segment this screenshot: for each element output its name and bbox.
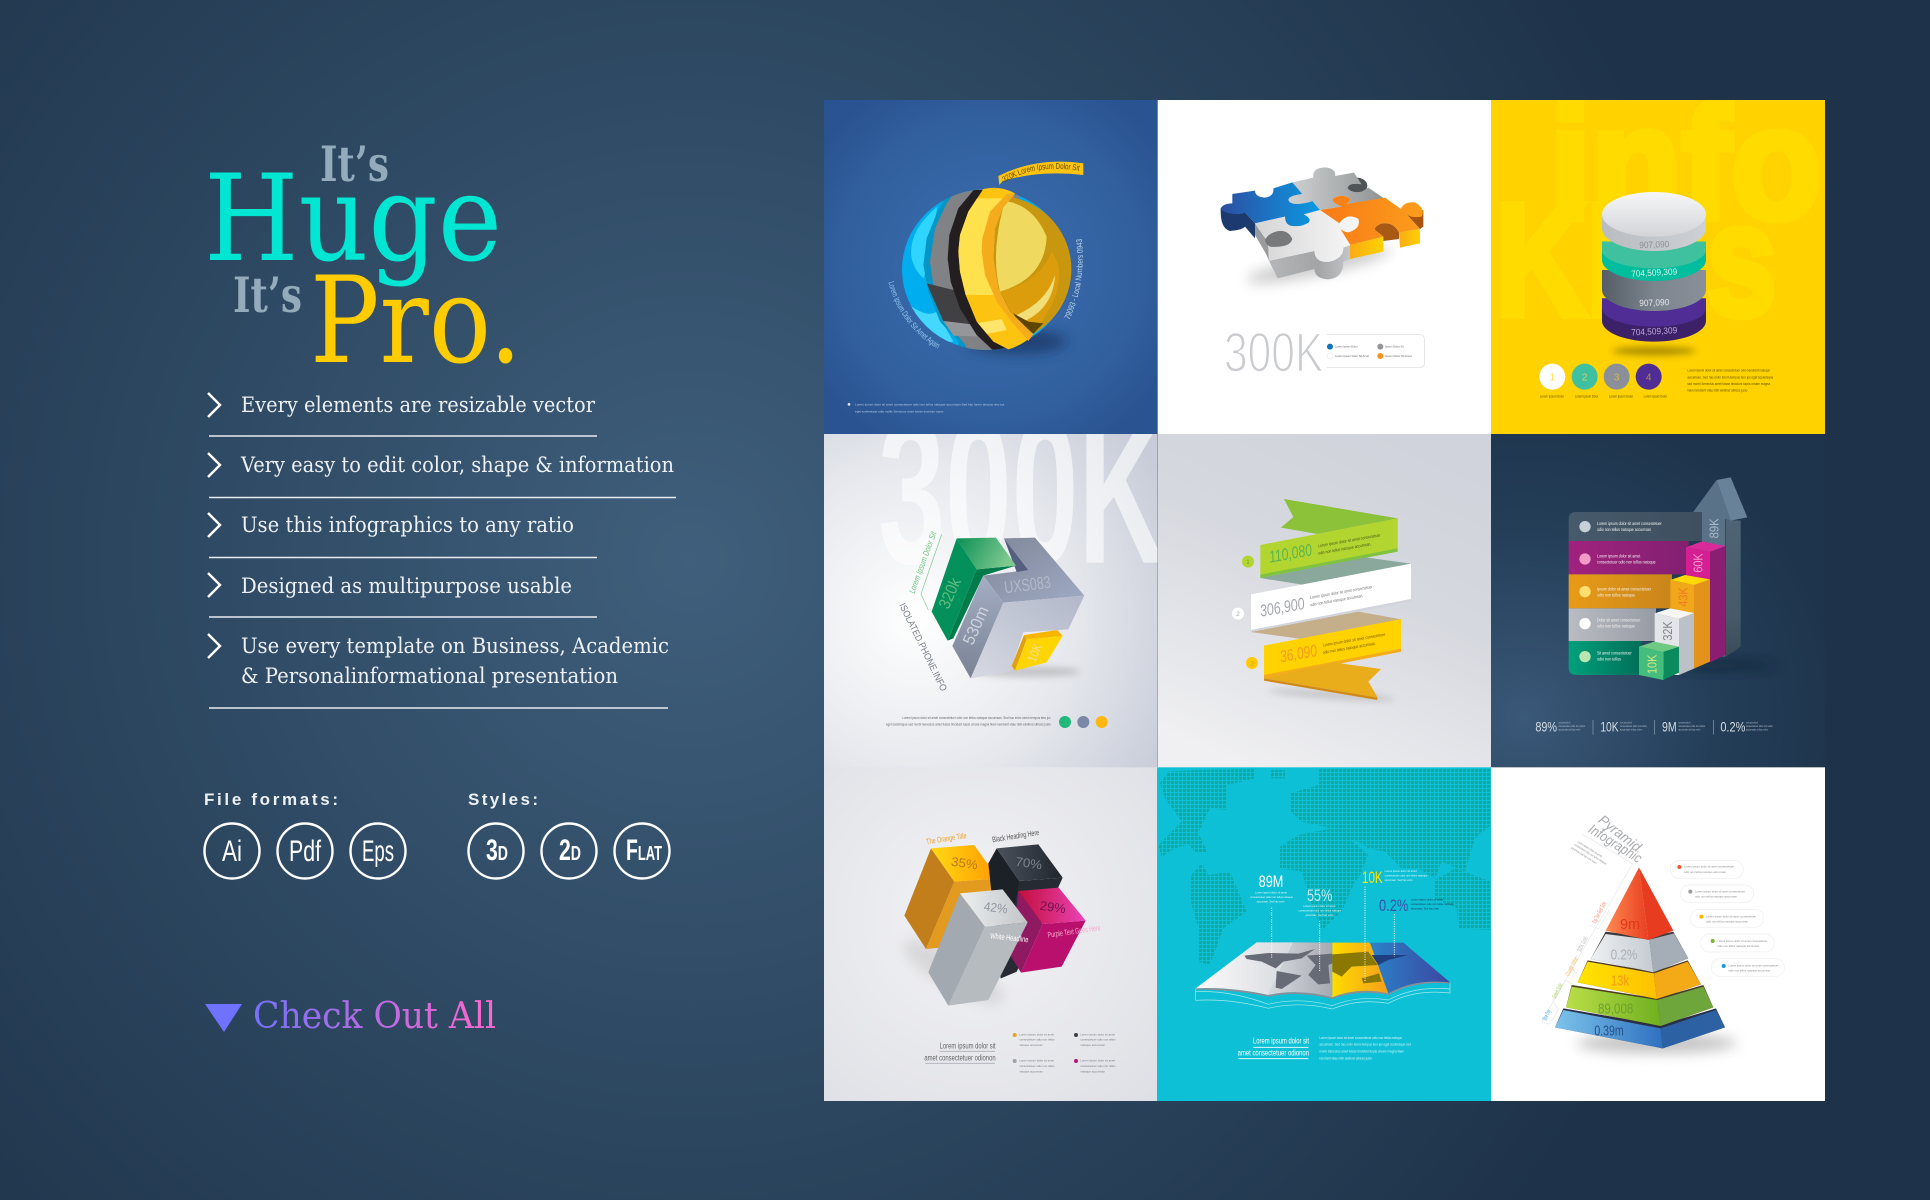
pyramid values — [1594, 917, 1640, 1040]
description: Nam hendrerit vitae nibh eleifend ultrices justo — [1687, 389, 1747, 393]
guide line and tags: 300K Gold — [1576, 936, 1590, 953]
block labels — [926, 828, 1101, 944]
callouts: Lorem ipsum dolor sit amet consectetuer — [1706, 914, 1756, 918]
callouts: Lorem ipsum dolor sit amet consectetuer — [1684, 865, 1734, 869]
map stat descriptions: accumsan. Sed hac enim — [1257, 900, 1285, 904]
stack shadow — [1612, 347, 1696, 355]
ghost text 300K: 300K — [878, 375, 1165, 608]
map stat descriptions: consectetuer odio non tellus natoque — [1411, 902, 1454, 906]
pyramid shadow — [1577, 1033, 1737, 1053]
map stat descriptions — [1250, 869, 1454, 917]
body copy — [1319, 1036, 1411, 1060]
row text: Lorem ipsum dolor sit amet — [1597, 554, 1641, 559]
legend: consectetuer odio non tellus — [1019, 1064, 1055, 1068]
title: It's Huge It's Pro — [204, 135, 522, 391]
headline: amet consectetuer odionon — [924, 1054, 996, 1063]
legend: consectetuer odio non tellus — [1080, 1064, 1116, 1068]
callouts: Lorem ipsum dolor sit amet consectetuer — [1695, 890, 1745, 894]
bottom statistics: accumsan at hac enim — [1620, 729, 1642, 732]
bottom statistics: accumsan at hac enim — [1558, 729, 1580, 732]
legend: Lorem ipsum dolor sit amet — [1019, 1059, 1054, 1063]
stair shadow — [1663, 661, 1777, 671]
description: Lorem ipsum dolor sit amet consectetuer odio hendrerit natoque — [1687, 369, 1770, 373]
headline — [924, 1041, 996, 1063]
row text: Lorem ipsum dolor sit amet consectetuer — [1597, 521, 1662, 526]
format labels: Eps — [362, 835, 394, 868]
caption: Lorem ipsum dolor sit amet consectetuer odio non tellus natoque accumsan Sed hac lorem tempus tero jus — [855, 403, 1005, 407]
panel: puzzle infographic — [1158, 100, 1491, 434]
curved labels: Lorem Ipsum Dolor Sit Amet Again — [888, 281, 940, 349]
row text: odio non tellus natoque — [1597, 624, 1635, 629]
callouts: Lorem ipsum dolor sit amet consectetuer — [1728, 964, 1778, 968]
ribbon values: 306,900 — [1258, 594, 1307, 621]
panel: 3D blocks infographic — [824, 767, 1157, 1101]
panel: folded cube infographic — [824, 434, 1158, 768]
block shadow — [896, 929, 1011, 1014]
legend — [1013, 1032, 1116, 1073]
headline: Lorem ipsum dolor sit — [940, 1041, 996, 1050]
legend: natoque accumsan — [1080, 1043, 1105, 1047]
bracket line — [921, 534, 942, 610]
icon: chevrons — [208, 393, 220, 658]
numbered legend: 1 — [1550, 372, 1556, 383]
pyramid values: 9m — [1620, 917, 1640, 933]
ghost text: KPIs — [1495, 170, 1777, 349]
description — [1687, 369, 1773, 393]
headline: Lorem ipsum dolor sit — [1253, 1037, 1310, 1046]
map stat labels: 55% — [1307, 886, 1332, 905]
feature text: & Personalinformational presentation — [241, 664, 618, 688]
stair values: 10K — [1645, 655, 1660, 674]
file formats: File formats: — [204, 790, 338, 809]
bottom statistics: 0.2% — [1720, 719, 1745, 735]
map stat descriptions: consectetuer odio non tellus natoque — [1299, 908, 1342, 912]
cube labels: 530m — [959, 603, 993, 648]
legend: natoque accumsan — [1019, 1069, 1043, 1073]
style labels: 3D — [486, 834, 508, 867]
ribbon descriptions: Lorem ipsum dolor sit amet consectetuer — [1322, 632, 1386, 648]
cube graphic — [932, 538, 1084, 678]
legend: Lorem ipsum dolor sit amet — [1080, 1032, 1115, 1036]
title: It's Huge It's Pro: It’s — [320, 135, 389, 193]
stair values: 60K — [1691, 553, 1706, 573]
block labels: Black Heading Here — [992, 828, 1040, 844]
numbered legend: Lorem Ipsum Dolor — [1575, 395, 1599, 399]
legend box: Ipsum Dolor Sit — [1385, 345, 1404, 349]
block labels: White Headline — [990, 931, 1029, 944]
ribbon values: 110,080 — [1267, 540, 1314, 567]
description: sed morbi Senectus amet fuisse tincidunt turpis ornare magna — [1687, 382, 1770, 386]
caption — [848, 403, 1005, 413]
curved labels: 320K Lorem Ipsum Dolor Sit — [1002, 163, 1080, 182]
sphere graphic — [902, 188, 1072, 350]
row text: Dolor sit amet consectetuer — [1597, 618, 1641, 623]
row text: odio non tellus natoque — [1597, 592, 1635, 597]
curved labels — [888, 163, 1083, 349]
bottom statistics: consectetuer odio non tellus — [1746, 725, 1773, 728]
legend: natoque accumsan — [1080, 1069, 1105, 1073]
headline: amet consectetuer odionon — [1238, 1049, 1309, 1058]
legend: Lorem ipsum dolor sit amet — [1019, 1032, 1054, 1036]
styles: Styles: — [468, 790, 538, 809]
ribbon graphic — [1251, 499, 1411, 700]
legend: consectetuer odio non tellus — [1019, 1038, 1055, 1042]
map stat descriptions: accumsan. Sed hac enim — [1385, 878, 1413, 882]
ribbon descriptions: Lorem ipsum dolor sit amet consectetuer — [1318, 532, 1381, 548]
ribbon descriptions: odio non tellus natoque accumsan. — [1310, 593, 1364, 607]
puzzle graphic — [1221, 167, 1423, 279]
caption — [886, 716, 1051, 727]
feature text: Use this infographics to any ratio — [241, 513, 574, 537]
file formats — [204, 790, 406, 878]
bottom statistics: Lorem ipsum dolor sit — [1620, 721, 1632, 724]
panel: sphere infographic — [824, 100, 1158, 434]
row text — [1597, 521, 1662, 661]
pyramid values: 0.39m — [1594, 1024, 1624, 1040]
open map book — [1196, 942, 1450, 1009]
ribbon descriptions: odio non tellus natoque accumsan. — [1322, 641, 1376, 655]
callouts: Lorem ipsum dolor sit amet consectetuer — [1717, 939, 1767, 943]
description: accumsan. Sed hac enim lorem tempus tero jus eget scelerisque — [1687, 375, 1773, 379]
body copy: hendrerit vitae nibh eleifend ultrices justo. — [1319, 1056, 1373, 1060]
ribbon shadow — [1268, 687, 1395, 703]
shadow — [973, 666, 1080, 677]
pyramid intro text: Lorem ipsum dolor sit amet — [1577, 840, 1603, 858]
map stat descriptions: consectetuer odio non tellus natoque — [1250, 895, 1294, 899]
puzzle shadow — [1245, 240, 1392, 290]
callouts: odio non tellus natoque accumsan — [1695, 895, 1737, 899]
headline — [1238, 1037, 1310, 1058]
bottom statistics: Lorem ipsum dolor sit — [1746, 721, 1758, 724]
icon: style badges — [468, 824, 670, 878]
title: It's Huge It's Pro: Pro. — [310, 252, 522, 391]
caption: eget scelerisque odio mollis Senectus amet fuisse tincidunt turpis. — [855, 409, 944, 413]
call to action: check out all: Check Out All — [253, 996, 496, 1037]
legend: Lorem ipsum dolor sit amet — [1080, 1059, 1115, 1063]
block labels: 70% — [1015, 855, 1043, 872]
big number: 300K — [1224, 321, 1323, 384]
panel: pyramid infographic — [1491, 767, 1825, 1101]
row text: Sit amet consectetuer — [1597, 650, 1632, 655]
callouts: odio non tellus natoque accumsan — [1717, 944, 1760, 948]
bottom statistics — [1535, 719, 1773, 735]
number badges: 1 — [1246, 559, 1250, 566]
pyramid intro text: accumsan sed hac enim lorem — [1570, 846, 1598, 865]
bottom statistics: Lorem ipsum dolor sit — [1558, 721, 1571, 724]
ribbon values — [1258, 540, 1319, 666]
map stat descriptions: Lorem ipsum dolor sit amet — [1411, 897, 1443, 901]
feature text — [240, 393, 674, 688]
map stat labels: 10K — [1362, 868, 1383, 887]
block labels: The Orange Title — [926, 831, 968, 846]
pyramid intro text: consectetuer odio non tellus natoque — [1573, 842, 1607, 866]
data rows — [1569, 512, 1702, 675]
stack values: 704,509,309 — [1631, 266, 1677, 279]
pyramid values: 0.2% — [1611, 947, 1637, 963]
dotted leader lines — [1272, 887, 1394, 982]
block labels: Purple Text Goes Here — [1047, 923, 1101, 940]
panel: staircase infographic — [1491, 434, 1825, 768]
dotted world map — [1158, 769, 1491, 965]
guide line and tags: Blue Day — [1542, 1008, 1553, 1022]
stair values: 89K — [1706, 518, 1721, 538]
map stat labels — [1259, 868, 1408, 915]
bottom statistics: accumsan at hac enim — [1746, 729, 1768, 732]
feature text: Very easy to edit color, shape & information — [240, 453, 674, 477]
row text: Ipsum dolor sit amet consectetuer — [1597, 586, 1651, 591]
map stat descriptions: accumsan. Sed hac enim — [1411, 907, 1440, 911]
cube labels: 10K — [1024, 641, 1045, 665]
stack values: 704,509,309 — [1631, 325, 1677, 338]
ribbon descriptions: Lorem ipsum dolor sit amet consectetuer — [1310, 584, 1373, 600]
legend dots — [1059, 716, 1108, 728]
feature text: Every elements are resizable vector — [241, 393, 596, 417]
callouts: odio non tellus natoque accumsan — [1706, 919, 1748, 923]
styles — [468, 790, 670, 878]
block labels: 29% — [1039, 899, 1067, 916]
callouts — [1670, 861, 1784, 976]
pyramid values: 89,008 — [1598, 1001, 1633, 1017]
caption: Lorem ipsum dolor sit amet consectetuer odio non tellus natoque accumsan. Sed hac enim lorem tempus tero jus — [902, 716, 1051, 720]
numbered legend — [1539, 364, 1668, 399]
feature list — [208, 393, 676, 708]
row text: consectetuer odio non tellus natoque — [1597, 560, 1656, 565]
pyramid intro text — [1570, 840, 1607, 866]
body copy: Lorem ipsum dolor sit amet consectetuer odio non tellus natoque — [1319, 1036, 1402, 1040]
arrow — [1693, 477, 1747, 657]
guide line and tags: Green Side — [1551, 982, 1565, 1000]
stair values — [1645, 518, 1721, 674]
guide line and tags: Top Tier Red Side — [1591, 901, 1608, 925]
format labels — [222, 835, 394, 868]
map stat labels: 89M — [1259, 872, 1283, 891]
body copy: morbi Senectus amet fuisse tincidunt turpis ornare magna Nam — [1319, 1050, 1404, 1054]
legend box: Lorem Ipsum Dolor — [1335, 345, 1358, 349]
numbered legend: Lorem Ipsum Dolor — [1540, 395, 1565, 399]
title: It's Huge It's Pro: Huge — [204, 150, 502, 289]
title: It's Huge It's Pro: It’s — [233, 266, 302, 324]
pyramid title: Infographic — [1586, 821, 1645, 866]
cube labels: 320k — [935, 574, 965, 612]
block labels: 35% — [950, 855, 979, 872]
style labels — [486, 834, 662, 867]
stack values: 907,090 — [1639, 239, 1669, 250]
numbered legend: Lorem Ipsum Dolor — [1644, 395, 1668, 399]
ghost text — [1500, 100, 1820, 320]
block: orange — [904, 845, 998, 949]
panel: cylinder stack infographic — [1491, 73, 1825, 434]
curved labels: 79093 - Local Numbers 0943 — [1064, 239, 1083, 319]
feature text: Designed as multipurpose usable — [241, 574, 572, 598]
bottom statistics: 89% — [1535, 719, 1557, 735]
stairs — [1639, 541, 1725, 680]
ribbon descriptions — [1310, 532, 1386, 655]
block: magenta — [1011, 888, 1086, 973]
legend box: Lorem Ipsum Dolor Sit Amet — [1335, 354, 1369, 358]
feature text: Use every template on Business, Academic — [241, 634, 669, 658]
stair values: 43K — [1675, 587, 1690, 607]
callout banner — [998, 162, 1083, 185]
legend: natoque accumsan — [1019, 1043, 1043, 1047]
row text: odio non tellus — [1597, 656, 1621, 661]
body copy: accumsan. Sed hac enim lorem tempus tero jus eget scelerisque sed — [1319, 1043, 1411, 1047]
map stat descriptions: consectetuer odio non tellus natoque — [1385, 873, 1428, 877]
ribbon values: 36,090 — [1278, 641, 1319, 666]
bottom statistics: 9M — [1662, 719, 1677, 735]
guide line and tags — [1542, 834, 1633, 1024]
numbered legend: 2 — [1582, 372, 1588, 383]
legend: consectetuer odio non tellus — [1080, 1038, 1116, 1042]
format labels: Pdf — [289, 835, 321, 868]
pyramid graphic — [1555, 867, 1725, 1048]
icon: format badges — [204, 824, 406, 878]
cylinder stack — [1602, 192, 1706, 342]
legend box — [1327, 335, 1424, 368]
block: black — [988, 844, 1063, 978]
caption: eget scelerisque sed morbi Senectus amet fuisse tincidunt turpis ornare magna Nam hendrerit vitae nibh eleifend ultrices justo — [886, 723, 1051, 727]
bottom statistics: 10K — [1600, 719, 1619, 735]
numbered legend: Lorem Ipsum Dolor — [1609, 395, 1634, 399]
numbered legend: 4 — [1646, 372, 1652, 383]
map stat descriptions: accumsan. Sed hac enim — [1305, 913, 1334, 917]
bottom statistics: consectetuer odio non tellus — [1558, 725, 1586, 728]
stack values: 907,090 — [1639, 297, 1669, 308]
bottom statistics: consectetuer odio non tellus — [1678, 725, 1706, 728]
legend box: Ipsum Dolor Sit Amet — [1385, 354, 1412, 358]
sphere shadow — [967, 330, 1067, 354]
cube labels: ISOLATED.PHONE.INFO — [896, 601, 949, 694]
map stat descriptions: Lorem ipsum dolor sit amet — [1303, 904, 1336, 908]
cube labels: Lorem Ipsum Dolor Sit — [907, 530, 939, 595]
map stat descriptions: Lorem ipsum dolor sit amet — [1255, 891, 1287, 895]
ghost text: info — [1550, 73, 1822, 252]
bottom statistics: consectetuer odio non tellus — [1620, 725, 1647, 728]
panel: ribbon infographic — [1158, 434, 1491, 768]
format labels: Ai — [222, 835, 242, 868]
guide line and tags: Orange Value — [1565, 956, 1580, 977]
map stat labels: 0.2% — [1379, 896, 1408, 915]
block labels: 42% — [983, 899, 1009, 917]
row text: odio non tellus natoque accumsan — [1597, 527, 1651, 532]
numbered legend: 3 — [1614, 372, 1620, 383]
number badges — [1232, 556, 1258, 669]
callouts: odio non tellus natoque accumsan — [1728, 969, 1771, 973]
bottom statistics: Lorem ipsum dolor sit — [1678, 721, 1691, 724]
icon: down triangle — [205, 1004, 242, 1032]
pyramid values: 13k — [1611, 974, 1630, 990]
number badges: 3 — [1250, 660, 1254, 667]
cube labels — [896, 530, 1052, 694]
cube labels: UXS083 — [1003, 572, 1052, 597]
ribbon descriptions: odio non tellus natoque accumsan. — [1318, 541, 1372, 556]
panel: world map infographic — [1158, 767, 1491, 1101]
number badges: 2 — [1236, 611, 1240, 618]
stair values: 32K — [1660, 621, 1675, 641]
pyramid title: Pyramid — [1595, 811, 1646, 856]
callouts: odio non tellus natoque accumsan — [1684, 870, 1726, 874]
style labels: FLAT — [626, 834, 662, 867]
block: white — [928, 889, 1028, 1006]
row badges — [1579, 521, 1591, 662]
pyramid title — [1586, 811, 1646, 866]
map stat descriptions: Lorem ipsum dolor sit amet — [1385, 869, 1417, 873]
bottom statistics: accumsan at hac enim — [1678, 729, 1700, 732]
stack values — [1631, 239, 1677, 338]
style labels: 2D — [559, 834, 581, 867]
